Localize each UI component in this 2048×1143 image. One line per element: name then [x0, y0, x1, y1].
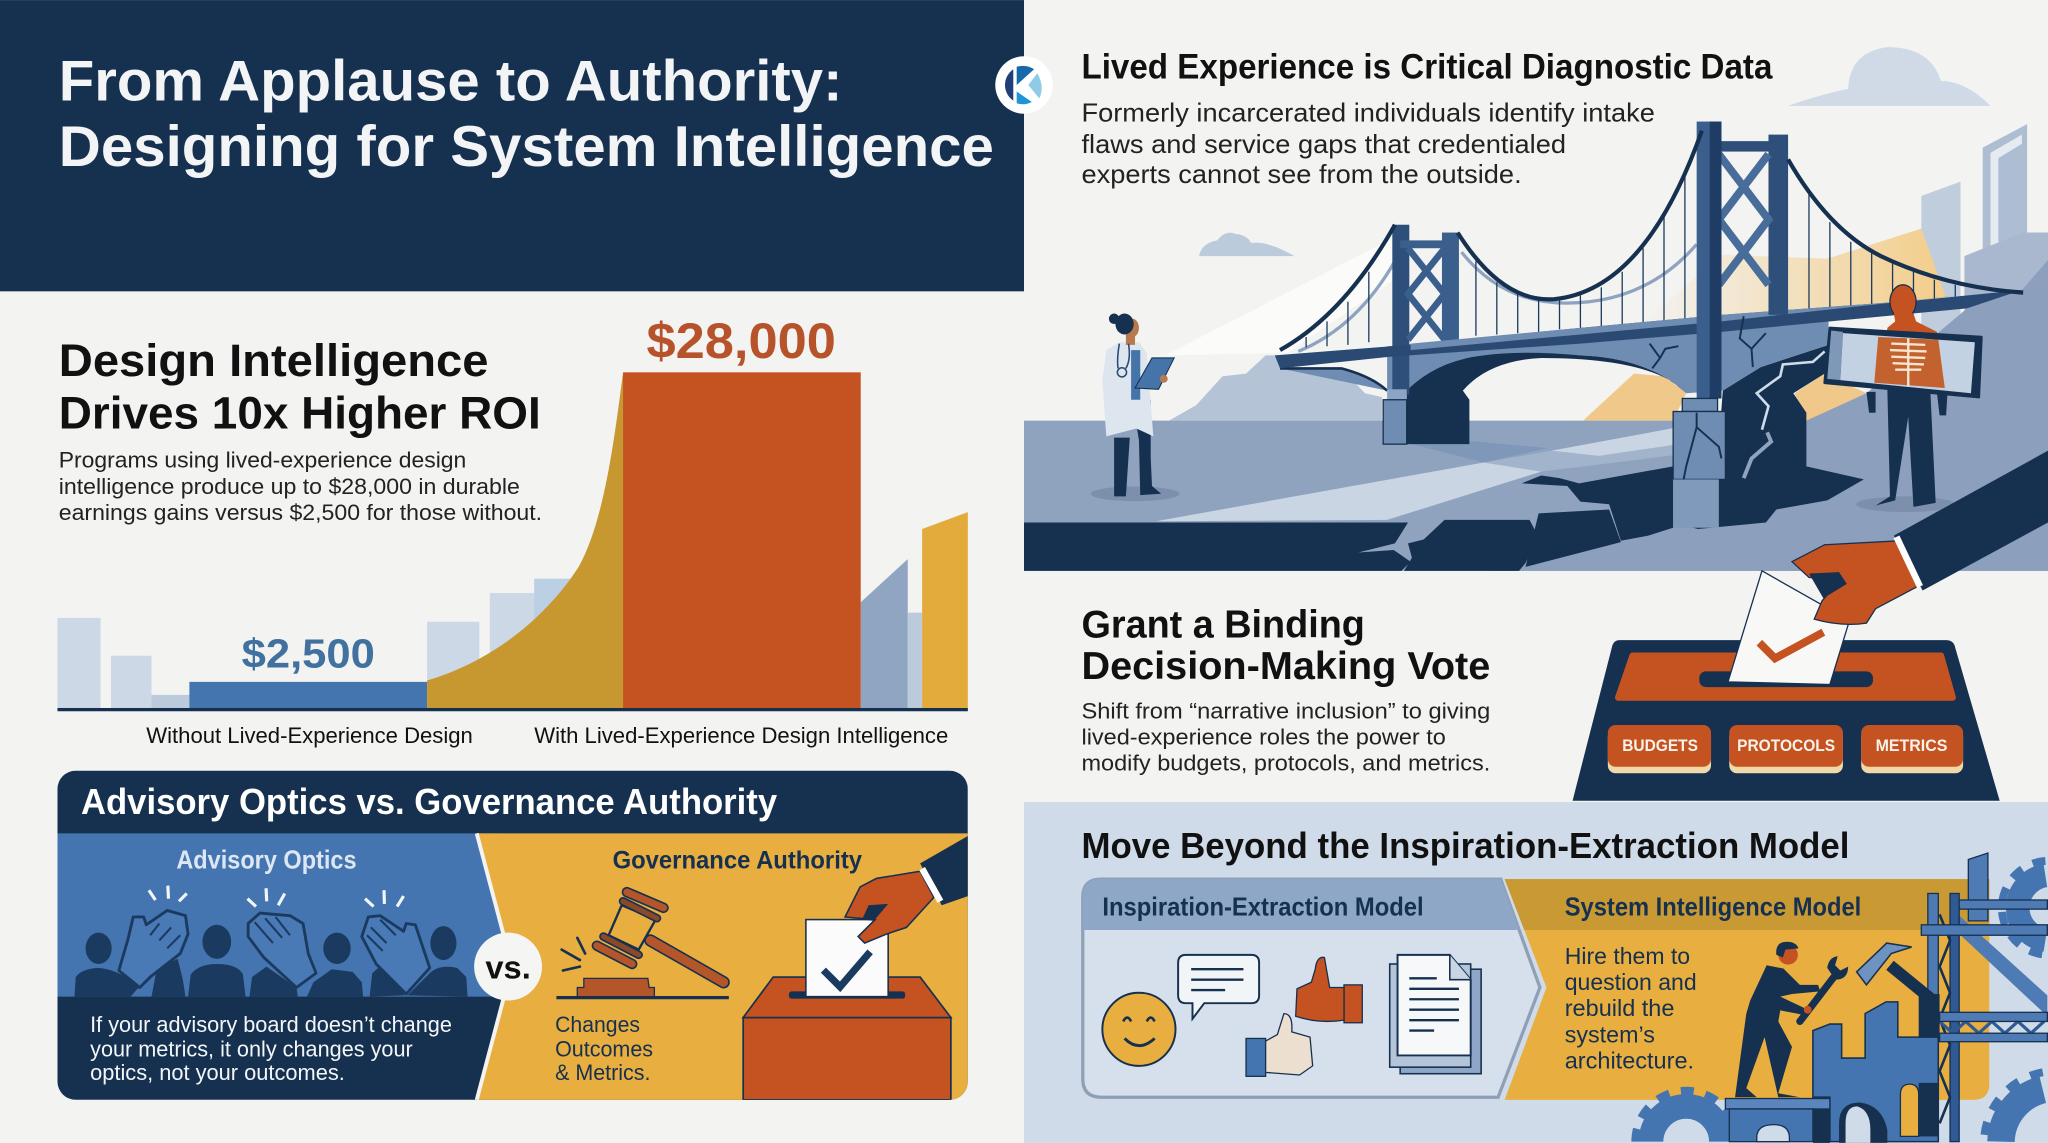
card: system intelligence model: system’s [1565, 1021, 1655, 1047]
card: system intelligence model: question and [1565, 969, 1697, 995]
text block: binding vote [1081, 603, 1490, 776]
icon: logo badge [995, 56, 1053, 114]
icon: thumbs up cream [1246, 1014, 1313, 1076]
icon: person holding x-ray [1825, 285, 1981, 512]
bar: with lived experience [623, 372, 861, 709]
button: budgets [1608, 725, 1711, 773]
icon: cloud large [1788, 47, 1991, 106]
icon: worker with wrench [1735, 942, 1848, 1097]
text block: design intelligence: Programs using lived-experience design [59, 448, 466, 473]
icon: scaffolding [1921, 853, 2047, 1142]
icon: right hillside [1489, 260, 2048, 571]
text block: diagnostic data: experts cannot see from the outside. [1081, 159, 1522, 189]
button: protocols: PROTOCOLS [1737, 736, 1835, 755]
text block: binding vote: modify budgets, protocols, and metrics. [1081, 751, 1490, 776]
text block: advisory optics note [90, 1012, 452, 1085]
subheading: advisory optics: Advisory Optics [176, 845, 357, 875]
icon: applause rays [149, 886, 404, 907]
icon: ground fracture [1024, 345, 1864, 571]
bridge cracks [1650, 316, 1766, 368]
icon: ballot box and hand [743, 836, 968, 1100]
arch dark inner [1407, 353, 1686, 444]
card: system intelligence model: Hire them to [1565, 943, 1690, 969]
icon: vs badge: vs. [485, 948, 531, 985]
icon: crack highlight [1744, 351, 1825, 478]
card: system intelligence model: rebuild the [1565, 995, 1674, 1021]
icon: far light streak [1552, 427, 1678, 456]
panel: title banner [0, 0, 1024, 291]
subheading: governance authority: Governance Authority [613, 848, 862, 875]
text block: advisory optics note: optics, not your outcomes. [90, 1060, 345, 1085]
title: Designing for System Intelligence [59, 115, 994, 179]
icon: sunlight below arch [1583, 374, 1866, 421]
icon: hand and ballot paper [1728, 451, 2048, 684]
card: system intelligence model: System Intelligence Model [1565, 892, 1861, 922]
label: $28,000: $28,000 [647, 313, 836, 369]
icon: hammer [1857, 943, 1933, 1001]
button: metrics [1861, 725, 1963, 773]
tower 1 [1383, 225, 1459, 444]
text block: binding vote: lived-experience roles the power to [1081, 725, 1446, 750]
panel: inspiration-extraction vs system intelligence [1024, 802, 2048, 1143]
x-ray tablet [1825, 328, 1981, 397]
icon: light streak on ground [1156, 462, 1541, 521]
icon: machine being rebuilt [1725, 994, 1940, 1143]
panel: grant a binding vote [1081, 451, 2048, 801]
card: inspiration-extraction model [1083, 879, 1540, 1097]
curve: growth area [427, 372, 623, 709]
panel: lived experience bridge scene [1024, 47, 2048, 571]
icon: light beam from clipboard [1165, 236, 1396, 355]
text block: design intelligence: Design Intelligence [59, 335, 488, 386]
text block: binding vote: Shift from “narrative inclusion” to giving [1081, 698, 1490, 723]
panel: advisory optics vs governance authority [57, 771, 968, 1100]
tower 2 [1673, 122, 1788, 528]
icon: sunlight above deck [1639, 229, 1946, 327]
text block: diagnostic data: Lived Experience is Critical Diagnostic Data [1081, 47, 1773, 86]
title: From Applause to Authority: [59, 50, 842, 114]
text block: design intelligence: earnings gains versus $2,500 for those without. [59, 500, 542, 525]
card: inspiration-extraction model: Inspiration-Extraction Model [1102, 892, 1424, 922]
icon: gears [1635, 861, 2045, 1142]
deck [1275, 290, 2022, 368]
button: metrics: METRICS [1876, 736, 1947, 755]
text block: diagnostic data [1081, 47, 1773, 189]
text block: binding vote: Decision-Making Vote [1081, 645, 1490, 688]
icon: document stack [1390, 955, 1481, 1074]
text block: advisory optics note: your metrics, it only changes your [90, 1037, 413, 1062]
text block: governance note: Changes [555, 1012, 640, 1037]
button: budgets: BUDGETS [1622, 736, 1698, 755]
ground [1024, 421, 2048, 571]
bar: without lived experience [189, 682, 427, 709]
icon: shade patch [1484, 431, 1678, 472]
text block: design intelligence: Drives 10x Higher ROI [59, 387, 541, 438]
text block: diagnostic data: Formerly incarcerated individuals identify intake [1081, 98, 1655, 128]
text block: binding vote: Grant a Binding [1081, 603, 1365, 646]
icon: thumbs up orange [1296, 957, 1362, 1023]
panel heading: Advisory Optics vs. Governance Authority [81, 781, 778, 822]
icon: skyline [1921, 124, 2048, 340]
left arch line [1280, 368, 1387, 391]
bridge arch and span [1280, 320, 1829, 393]
icon: speech bubble [1178, 955, 1259, 1019]
icon: suspension bridge [1275, 122, 2023, 528]
card: system intelligence model: architecture. [1565, 1047, 1694, 1073]
bar chart: ROI comparison [57, 313, 968, 748]
text block: design intelligence [59, 335, 542, 525]
button: protocols [1729, 725, 1843, 773]
icon: audience silhouettes [74, 925, 468, 997]
heading: Move Beyond the Inspiration-Extraction Model [1081, 825, 1849, 866]
icon: doctor with clipboard [1091, 314, 1179, 501]
title [59, 50, 994, 179]
icon: mountain [1169, 355, 1382, 421]
icon: cloud small [1199, 233, 1294, 256]
text block: governance note [555, 1012, 653, 1085]
text block: governance note: Outcomes [555, 1037, 653, 1062]
card: system intelligence model [1505, 879, 1989, 1100]
icon: pier shadow [1407, 442, 1548, 462]
axis label: without: Without Lived-Experience Design [146, 723, 473, 748]
text block: governance note: & Metrics. [555, 1060, 650, 1085]
icon: vs badge [474, 933, 542, 1001]
icon: ballot box with levers [1573, 640, 2000, 801]
icon: hand finger lines [150, 917, 396, 951]
icon: clapping hands [119, 910, 430, 994]
label: $2,500: $2,500 [242, 630, 375, 676]
text block: diagnostic data: flaws and service gaps that credentialed [1081, 129, 1566, 159]
text block: design intelligence: intelligence produce up to $28,000 in durable [59, 474, 520, 499]
icon: smiley [1102, 993, 1176, 1066]
text block: advisory optics note: If your advisory board doesn’t change [90, 1012, 452, 1037]
icon: gavel [556, 892, 729, 999]
axis label: with: With Lived-Experience Design Intelligence [534, 723, 948, 748]
